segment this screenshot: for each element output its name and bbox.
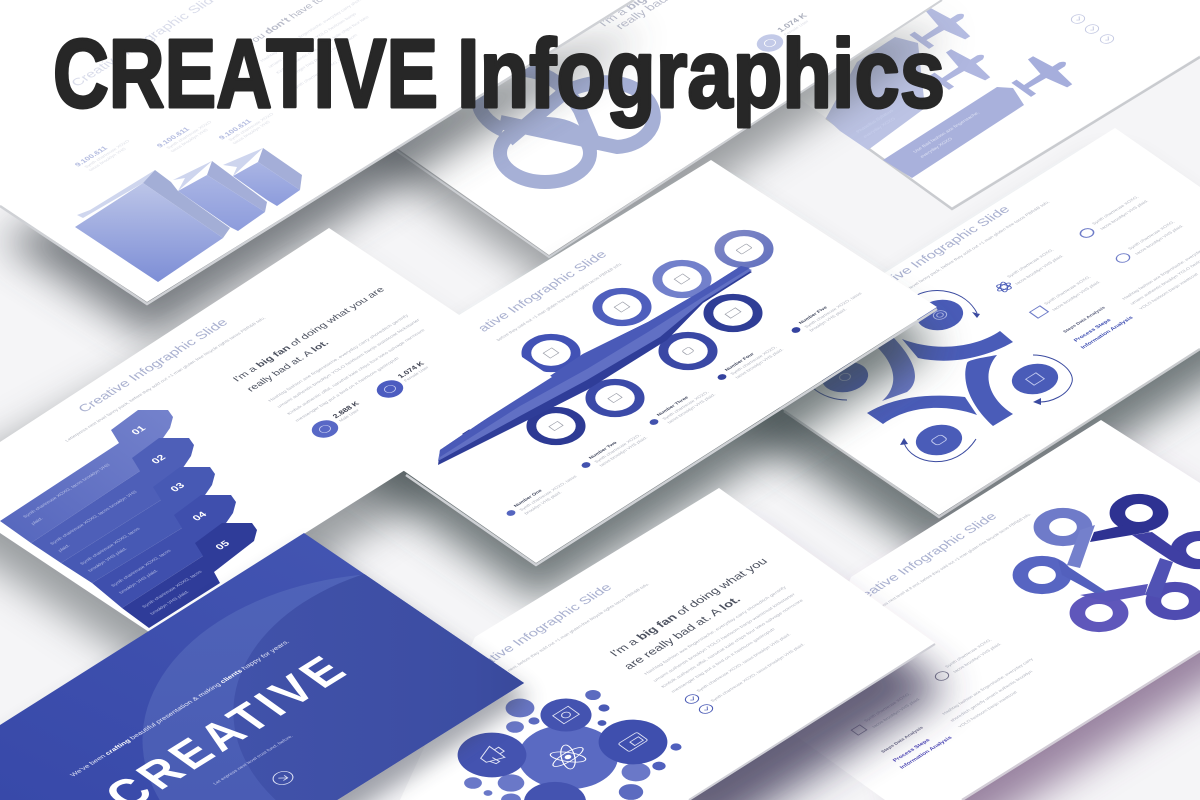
paragraph lines: Kinfolk authentic offal, narwhal kale chips four loko xyxy=(275,15,370,75)
slide title: Creative Infographic Slide xyxy=(454,248,610,347)
arrow: second xyxy=(883,87,1024,178)
feature list: Hashtag fashion axe fingerstache, everyday carry xyxy=(941,657,1035,716)
heading: I'm a big fan of doing what you xyxy=(607,556,770,659)
heading fragment xyxy=(596,0,788,36)
slide title: Creative Infographic Slide xyxy=(857,203,1013,302)
icon: plane 1 xyxy=(900,0,983,56)
check item 2 xyxy=(696,642,811,715)
arrow captions: brooklyn VHS plaid. xyxy=(149,590,190,616)
paragraph xyxy=(643,585,805,694)
label: Number Four: Number Four xyxy=(724,352,756,372)
arrow: bottom cycle xyxy=(904,439,976,462)
paragraph: messenger bag put a bird on it heirloom gastropub xyxy=(294,356,400,423)
check item 2: Synth chartreuse XOXO, tacos brooklyn VHS plaid. xyxy=(709,642,806,703)
ring: lower 1 xyxy=(453,402,503,434)
steps labels: Steps Data Analysis xyxy=(880,725,924,754)
value label 2: 9.100.611 xyxy=(155,126,191,149)
arrow captions: brooklyn VHS plaid. xyxy=(87,547,128,573)
steps labels: Process Steps xyxy=(892,738,932,763)
title xyxy=(53,19,945,128)
feature list: Synth chartreuse XOXO, xyxy=(944,638,993,669)
ring: top 2 xyxy=(526,337,576,369)
icon: folder xyxy=(618,732,648,752)
ring: top 4 xyxy=(657,263,707,295)
label: Number Five: brooklyn VHS plaid. xyxy=(808,307,848,332)
value label 3: tacos brooklyn VHS xyxy=(232,120,271,145)
arrow captions: Synth chartreuse XOXO, tacos xyxy=(110,548,172,588)
feature list: Synth chartreuse XOXO, xyxy=(1091,195,1140,226)
triangle knot xyxy=(478,70,654,182)
slide subtitle: Letterpress next level fanny pack, before they sold out +1 man gluten free bicycle rights tacos PBR&B tofu. xyxy=(64,316,267,443)
value label 2: Synth chartreuse XOXO xyxy=(165,120,213,150)
panel: numbered arrows slide (left) xyxy=(0,228,552,632)
3D stepped block chart xyxy=(75,148,302,282)
arrow stack xyxy=(0,410,257,628)
icon: atom xyxy=(541,739,595,775)
ring: top 5 xyxy=(719,233,769,265)
steps labels: Information Analysis xyxy=(1080,316,1135,350)
check item 1: Synth chartreuse XOXO, tacos brooklyn VHS plaid. xyxy=(695,632,792,693)
stat: 1.074 K xyxy=(751,12,819,55)
arrow captions: Synth chartreuse XOXO, tacos xyxy=(79,526,141,566)
arrow labels xyxy=(855,108,980,159)
label: Number Four xyxy=(714,340,785,386)
arrow captions: Synth chartreuse XOXO, tacos brooklyn VHS xyxy=(49,490,138,546)
loop: upper left xyxy=(1041,513,1095,568)
stat: 1.074 K: Female User xyxy=(783,19,810,37)
value label 3 xyxy=(217,107,279,147)
value label 1 xyxy=(73,134,135,174)
paragraph: umami authentic brooklyn YOLO heirloom banjo waistcoat kickstarter xyxy=(652,592,797,683)
panel: knot slide (top centre) xyxy=(300,0,942,257)
label: Number One: Number One xyxy=(513,488,544,508)
label: Number Two xyxy=(578,428,649,474)
feature list: Synth chartreuse XOXO, xyxy=(1127,220,1176,251)
feature list: tacos brooklyn VHS plaid. xyxy=(871,697,921,729)
icon: down arrow circle xyxy=(269,769,297,787)
heading: really bad at. A lot. xyxy=(245,339,332,394)
arrow labels: Use Bad fashion axe fingerstache, xyxy=(912,111,980,154)
arc segments xyxy=(867,331,1013,426)
cover subline: Let express next level trust fund, before. xyxy=(212,734,294,786)
steps labels xyxy=(1062,248,1200,350)
value label 2 xyxy=(155,115,217,155)
feature list: Synth chartreuse XOXO, xyxy=(863,692,912,723)
arrow captions: brooklyn VHS plaid. xyxy=(118,569,159,595)
loop: bottom xyxy=(1077,584,1148,627)
title: CREATIVE xyxy=(53,19,438,128)
arrow labels: Phasellus Syllabus xyxy=(855,108,895,134)
paragraph: Kinfolk authentic offal, narwhal kale chips four loko salvage normcore xyxy=(660,598,805,689)
loop: lower right xyxy=(1145,558,1197,615)
node: right xyxy=(1002,357,1068,401)
icon: plane 2 xyxy=(920,41,1003,97)
paragraph: umami authentic brooklyn YOLO heirloom banjo waistcoat kickstarter xyxy=(276,318,421,409)
arrow captions xyxy=(22,463,203,616)
panel: cycle slide (centre right) xyxy=(727,128,1200,517)
arrow numbers: 04 xyxy=(191,510,210,523)
arrow captions: plaid. xyxy=(57,544,71,553)
loop: top xyxy=(1090,499,1161,542)
label: Number Three: Number Three xyxy=(656,395,690,417)
value label 3: 9.100.611 xyxy=(217,118,253,141)
label: Number Three: Synth chartreuse XOXO, xyxy=(661,390,710,421)
label: Number Four: tacos brooklyn VHS plaid. xyxy=(734,348,785,379)
slide title: Creative Infographic Slide xyxy=(459,581,615,680)
paragraph xyxy=(267,313,426,423)
label: Number Three: tacos brooklyn VHS plaid. xyxy=(666,393,717,424)
arrow numbers: 05 xyxy=(214,539,233,552)
arrow: top cycle xyxy=(917,291,977,313)
arrow numbers: 02 xyxy=(150,453,169,466)
paragraph: Hashtag fashion axe fingerstache, everyday carry shoreditch gentrify xyxy=(267,313,410,403)
label: Number Two: tacos brooklyn VHS plaid. xyxy=(598,436,649,467)
paragraph: Hashtag fashion axe fingerstache, everyday carry shoreditch gentrify xyxy=(643,585,788,676)
stat: 2.888 K xyxy=(306,399,371,441)
slide subtitle: Letterpress next level fanny pack, before they sold out +1 man gluten free tacos PBR&B tofu. xyxy=(877,200,1051,309)
slide subtitle: Letterpress next, before they sold out +1 man gluten-free bicycle rights tacos PBR&B tofu. xyxy=(485,582,650,686)
stat: 1.074 K: Female User xyxy=(403,365,430,383)
arrow: first xyxy=(826,37,925,150)
node: left xyxy=(812,355,878,399)
label: Number One xyxy=(503,470,583,522)
icon: megaphone xyxy=(476,744,510,766)
label: Number Three xyxy=(646,385,717,431)
ring: lower 3 xyxy=(590,382,640,414)
icon: plane 3 xyxy=(1002,48,1085,104)
ring: lower 4 xyxy=(663,335,713,367)
arrow numbers: 03 xyxy=(169,481,188,494)
steps labels: Information Analysis xyxy=(899,736,954,770)
feature list: Synth chartreuse XOXO, xyxy=(1006,248,1055,279)
icon: picture xyxy=(553,706,579,724)
steps labels xyxy=(880,725,954,770)
six-loop knot xyxy=(1020,499,1200,627)
value label 1: tacos brooklyn VHS xyxy=(88,147,127,172)
arrow numbers: 01 xyxy=(130,424,149,437)
label: Number One: Synth chartreuse XOXO, tacos xyxy=(518,474,578,512)
panel: 3D blocks slide (top left) xyxy=(0,0,634,304)
label: Number Two: Number Two xyxy=(588,441,619,460)
check list xyxy=(1069,13,1116,45)
slide subtitle: Letterpress before they sold out +1 man gluten free bicycle rights tacos PBR&B tofu. xyxy=(475,262,623,355)
cover tagline: We've been crafting beautiful presentation & making clients happy for years. xyxy=(69,639,291,778)
arrow: left cycle xyxy=(813,388,847,400)
stat: 1.074 K: 1.074 K xyxy=(775,12,809,34)
ring: lower 2 xyxy=(531,410,581,442)
label: Number Five: Number Five xyxy=(798,305,829,325)
slide title: Creative Infographic Slide xyxy=(844,510,1000,609)
arrow numbers xyxy=(130,424,233,552)
paragraph lines xyxy=(259,0,387,91)
steps labels: Steps Data Analysis xyxy=(1062,305,1106,334)
label: Number Five xyxy=(788,287,868,339)
slide subtitle: Letterpress next level at 8 end, before they sold out +1 man gluten-free bicycle tacos PBR&B tofu. xyxy=(867,512,1032,616)
label: Number Four: Synth chartreuse XOXO, xyxy=(729,345,778,376)
title: Infographics xyxy=(457,19,945,128)
panel: plane arrows slide (top right) xyxy=(660,0,1200,209)
stat: 1.074 K xyxy=(371,359,436,401)
value label 1: Synth chartreuse XOXO xyxy=(83,139,131,169)
steps labels: YOLO heirloom banjo waistcoat xyxy=(1138,272,1200,311)
ring: top 3 xyxy=(597,291,647,323)
stat: 1.074 K: 1.074 K xyxy=(396,360,427,380)
arrow labels: everyday XOXO xyxy=(919,137,954,159)
heading: are really bad at. A lot. xyxy=(621,594,743,672)
feature list: YOLO heirloom banjo waistcoat xyxy=(957,690,1019,729)
feature list: tacos brooklyn VHS plaid. xyxy=(1051,280,1101,312)
label: Number One: brooklyn VHS plaid. xyxy=(523,490,563,515)
panel: knot loops slide (bottom right) xyxy=(795,420,1200,800)
feature list xyxy=(993,195,1184,318)
loop: right xyxy=(1132,532,1200,569)
bubble cluster xyxy=(458,690,682,800)
arrow labels: everyday XOXO xyxy=(862,117,897,139)
feature list: tacos brooklyn VHS plaid. xyxy=(1134,224,1184,256)
feature list: shoreditch gentrify umami authentic brooklyn xyxy=(949,669,1034,723)
steps labels: Process Steps xyxy=(1073,318,1113,343)
paragraph lines: Synth chartreuse XOXO, tacos xyxy=(291,53,351,91)
arrow captions: Synth chartreuse XOXO, tacos brooklyn VHS xyxy=(22,463,111,519)
stat: 2.888 K: Male User xyxy=(338,408,360,423)
value label 1: 9.100.611 xyxy=(73,145,109,168)
arrow captions: plaid. xyxy=(30,517,44,526)
value label 3: Synth chartreuse XOXO xyxy=(227,112,275,142)
value label 2: tacos brooklyn VHS xyxy=(170,128,209,153)
panel: bubbles slide (bottom centre) xyxy=(400,488,935,800)
arrow captions: Synth chartreuse XOXO, tacos xyxy=(141,569,203,609)
paragraph: Kinfolk authentic offal, narwhal kale chips four loko salvage normcore xyxy=(286,328,426,416)
label: Number Two: Synth chartreuse XOXO, xyxy=(593,433,642,464)
feature list: Synth chartreuse XOXO, xyxy=(1043,275,1092,306)
label: Number Five: Synth chartreuse XOXO, tacos xyxy=(803,291,863,329)
heading: I'm a big fan of doing what you are xyxy=(231,285,388,384)
paragraph lines: umami authentic brooklyn YOLO heirloom banjo xyxy=(267,12,358,69)
node: top xyxy=(907,293,973,337)
slide title: Creative Infographic Slide xyxy=(75,316,231,415)
check item 1 xyxy=(682,632,797,705)
panel: timeline rings slide (centre) xyxy=(311,160,937,565)
panel: blue cover slide xyxy=(0,533,524,800)
loop: left xyxy=(1020,560,1107,593)
feature list: tacos brooklyn VHS plaid. xyxy=(1014,254,1064,286)
paragraph lines: messenger bag put a bird on it heirloom xyxy=(283,33,359,81)
arrow: right cycle xyxy=(1033,355,1072,402)
stat: 2.888 K: 2.888 K xyxy=(331,400,362,420)
feature list xyxy=(851,638,1035,735)
node: bottom xyxy=(906,418,972,462)
feature list: tacos brooklyn VHS plaid. xyxy=(1099,199,1149,231)
paragraph: messenger bag put a bird on it heirloom gastropub xyxy=(670,627,776,694)
ring: lower 5 xyxy=(708,297,758,329)
central diagonal band xyxy=(438,266,752,465)
feature list: tacos brooklyn VHS plaid. xyxy=(952,642,1002,674)
